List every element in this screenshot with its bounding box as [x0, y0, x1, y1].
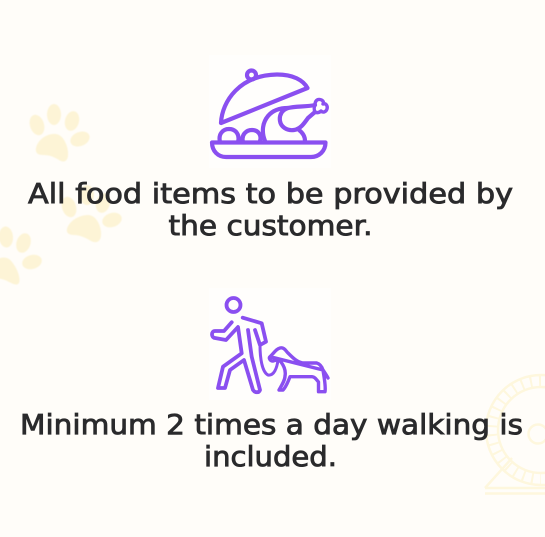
- chicken body: [263, 108, 288, 141]
- heading: walking text: [20, 408, 523, 473]
- chicken bone: [314, 99, 327, 113]
- side dish balls: [220, 129, 239, 142]
- person head: [226, 298, 240, 312]
- paw print: lower left: [0, 226, 43, 285]
- cloche dome: [221, 74, 308, 123]
- heading: walking text: Minimum 2 times a day walking is: [20, 408, 523, 441]
- person far arm: [243, 318, 266, 345]
- icon: person walking dog on a leash: [212, 298, 328, 392]
- background paw prints: [0, 104, 124, 285]
- paw print: middle: [59, 185, 124, 242]
- plate: [212, 142, 326, 157]
- icon: covered dish with roast chicken: [212, 70, 327, 157]
- heading: food text: All food items to be provided by: [28, 177, 513, 210]
- background hamster wheel: [485, 375, 545, 494]
- white icon backing: walking: [209, 288, 331, 400]
- cloche handle: [247, 70, 256, 80]
- person arm, torso and legs: [212, 322, 260, 392]
- paw print: top: [27, 104, 92, 161]
- white icon backing: food: [209, 55, 331, 168]
- heading: walking text: included.: [204, 440, 337, 473]
- heading: food text: the customer.: [168, 209, 372, 242]
- chicken thigh: [280, 105, 315, 130]
- dog: [269, 348, 328, 392]
- heading: food text: [28, 177, 513, 242]
- leash: [260, 345, 278, 375]
